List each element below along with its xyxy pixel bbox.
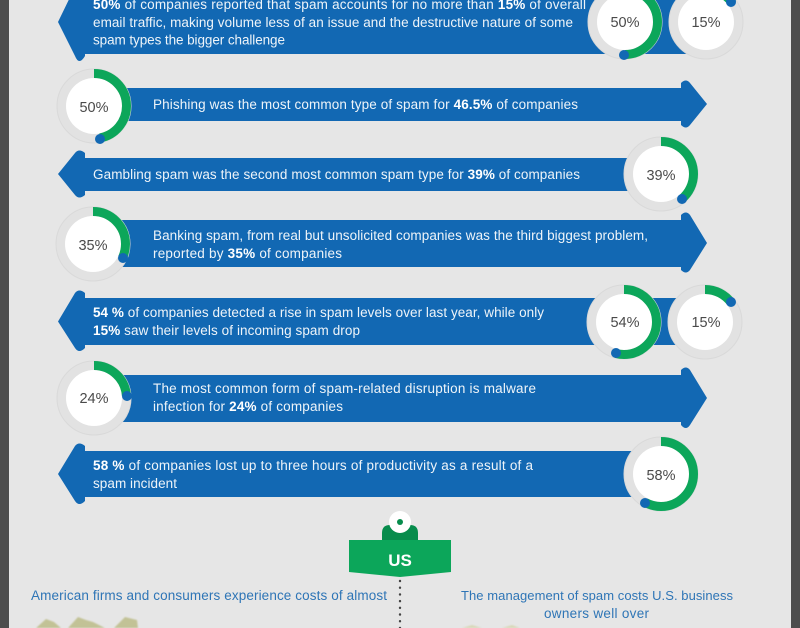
panel: phishing stat [57, 69, 707, 144]
donut: 50%: 50% [610, 15, 640, 31]
arrow: left pointing [58, 150, 650, 198]
heading: US banner: US [388, 551, 412, 570]
text: banking: Banking spam, from real but unsolicited companies was the third biggest problem, [153, 228, 648, 243]
text: spam volume [93, 0, 586, 48]
donut: 50% [57, 69, 131, 144]
donut: 50% [588, 0, 662, 60]
donut: 54%: 54% [610, 315, 640, 331]
donut: 54% [587, 285, 661, 359]
text: productivity: 58 % of companies lost up to three hours of productivity as a result of a [93, 458, 533, 473]
donut: 39%: 39% [646, 168, 676, 184]
donut: 35% [56, 207, 130, 281]
panel: banking stat [56, 207, 707, 281]
icon: money stacks [36, 617, 138, 628]
donut: 15%: 15% [691, 315, 721, 331]
panel: gambling stat [58, 137, 698, 211]
text: spam levels [93, 305, 544, 338]
donut: 15%: 15% [691, 15, 721, 31]
text: productivity: spam incident [93, 476, 177, 491]
donut: 24% [57, 361, 132, 435]
panel: lost productivity stat [58, 437, 698, 511]
icon: money stacks right [462, 625, 520, 628]
text: American firms costs: American firms and consumers experience costs of almost [31, 588, 387, 603]
donut: 58% [624, 437, 698, 511]
panel: rising spam levels stat [58, 285, 742, 359]
panel: malware stat [57, 361, 707, 435]
text: banking: reported by 35% of companies [153, 246, 342, 261]
arrow: right pointing [100, 368, 707, 428]
text: malware: The most common form of spam-related disruption is malware [153, 381, 536, 396]
donut: 50%: 50% [79, 100, 109, 116]
donut: 15% [668, 285, 742, 359]
dotted divider line [399, 581, 401, 628]
text: banking [153, 228, 648, 261]
arrow: left pointing [58, 444, 650, 504]
text: spam levels: 54 % of companies detected a rise in spam levels over last year, while only [93, 305, 544, 320]
donut: 35%: 35% [78, 238, 108, 254]
arrow: left pointing [58, 290, 690, 351]
text: phishing: Phishing was the most common type of spam for 46.5% of companies [153, 97, 578, 112]
arrow: right pointing [100, 212, 707, 272]
arrow: left pointing [58, 0, 690, 61]
donut: 24%: 24% [79, 391, 109, 407]
donut: 15% [669, 0, 743, 59]
text: malware: infection for 24% of companies [153, 399, 343, 414]
text: gambling: Gambling spam was the second most common spam type for 39% of companies [93, 167, 580, 182]
text: spam volume: email traffic, making volume less of an issue and the destructive nature of some [93, 15, 573, 30]
donut: 39% [624, 137, 698, 211]
donut: 58%: 58% [646, 468, 676, 484]
panel: volume of spam stat [58, 0, 743, 61]
text: management of spam costs: The management of spam costs U.S. business [461, 588, 734, 603]
text: management of spam costs: owners well over [544, 606, 650, 621]
text: productivity [93, 458, 533, 491]
text: spam volume: spam types the bigger challenge [93, 32, 285, 48]
text: spam levels: 15% saw their levels of incoming spam drop [93, 323, 360, 338]
heading: US banner [349, 511, 451, 577]
text: malware [153, 381, 536, 414]
text: management of spam costs [461, 588, 734, 621]
arrow: right pointing [100, 80, 707, 128]
